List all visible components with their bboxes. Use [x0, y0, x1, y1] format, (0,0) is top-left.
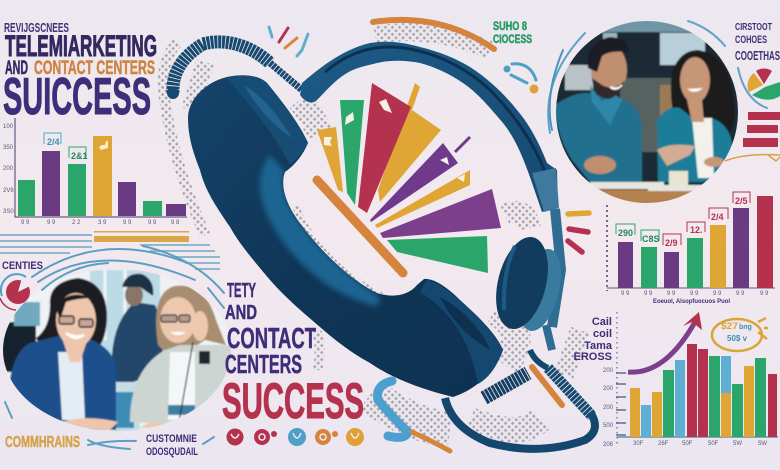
label: customer text [146, 433, 198, 458]
badge: gold circle stat: $27 [721, 321, 738, 331]
bar chart: right lower with arrow [603, 312, 778, 448]
headset ear cup [487, 232, 569, 335]
icon: curly phone cord left [167, 42, 302, 99]
middle heading block: SUCCESS [222, 373, 364, 429]
label: customer text: CUSTOMNIE [146, 433, 197, 445]
bar chart: top left: 2 2 [72, 220, 81, 226]
halftone dot backdrop [163, 32, 580, 430]
bar chart: right upper: C8S [642, 234, 660, 244]
bar chart: top left: 9 9 [47, 220, 56, 226]
bar chart: right upper [607, 192, 775, 305]
fan chart: coloured rays [317, 83, 501, 273]
photo: two women at desk [3, 269, 231, 431]
person: woman with curly hair [657, 50, 735, 182]
label: centers: CENTIES [2, 260, 43, 272]
label: chart axis title [573, 316, 613, 363]
bar chart: right lower with arrow: 500 [603, 423, 614, 429]
bar chart: top left: 100 [3, 124, 14, 130]
bar chart: right lower with arrow: 50F [708, 441, 719, 447]
bar chart: right upper: 9 9 [760, 291, 769, 297]
blue arcs around right photo [548, 21, 767, 133]
person: man in teal shirt [555, 37, 642, 182]
bar chart: top left: 9 9 [148, 220, 157, 226]
headset band [300, 42, 561, 327]
bar chart: right lower with arrow: 200 [603, 405, 614, 411]
bar chart: right lower with arrow: 200 [603, 368, 614, 374]
bar chart: right upper: 9 9 [713, 291, 722, 297]
middle heading block [222, 280, 364, 429]
label: success process: CIOCESS [493, 32, 532, 46]
text lines strip: left middle [0, 231, 220, 270]
label: chart axis title: Cail [592, 316, 612, 328]
small accent strokes top [269, 27, 308, 56]
person: woman right in grey jacket [130, 286, 232, 428]
bar chart: right upper: 9 9 [667, 291, 676, 297]
label: customer text: ODOSQUDAIL [146, 446, 198, 458]
orange swoosh top [373, 20, 494, 49]
person: man in background [111, 274, 163, 385]
middle heading block: CENTERS [225, 349, 302, 379]
right heading text [735, 22, 780, 63]
middle heading block: CONTACT [227, 323, 316, 355]
bar chart: top left: 350 [3, 145, 14, 151]
bar chart: top left: 2V8 [3, 188, 14, 194]
headset cable [445, 325, 595, 449]
title block: top left: CONTACT CENTERS [34, 58, 155, 79]
title block: top left: AND [5, 58, 28, 79]
blue arcs over left photo [5, 246, 224, 449]
bar chart: right upper: 9 9 [736, 291, 745, 297]
icon: blue curved arrow [378, 381, 408, 437]
bar chart: right upper: 12. [690, 225, 703, 235]
label: success process: SUHO 8 [493, 19, 527, 33]
bar chart: right upper: Eoeuol, Alsopfuocuos Puol [653, 298, 730, 305]
label: success process [493, 19, 532, 46]
label: chart axis title: Tama [584, 340, 613, 352]
icon: small blue hook with dot [504, 64, 538, 94]
accent strokes right of headset [568, 213, 589, 252]
bar chart: top left: 9 9 [21, 220, 30, 226]
icon row: five round badges [226, 428, 364, 446]
bar chart: top left [3, 118, 187, 226]
badge: gold circle stat: 50$ v [727, 334, 748, 343]
title block: top left: TELEMIARKETING [5, 30, 157, 63]
icon: right pie chart [747, 68, 780, 100]
bar chart: right lower with arrow: 200 [603, 386, 614, 392]
bar chart: top left: 2/4 [47, 137, 60, 147]
bar chart: right upper: 2/4 [711, 212, 724, 222]
bar chart: right upper: 9 9 [690, 291, 699, 297]
photo: man and woman at cafe table [555, 20, 739, 208]
bar chart: right lower with arrow: 206 [603, 442, 614, 448]
accent: orange dash under arrow [412, 432, 450, 451]
telephone handset [188, 75, 503, 397]
bar chart: right upper: 2/9 [665, 238, 678, 248]
person: woman left in blue jacket [7, 278, 118, 430]
badge: gold circle stat: bng [739, 324, 752, 331]
middle heading block: TETY [227, 280, 256, 302]
label: chart axis title: coil [593, 328, 612, 340]
red legend buttons [743, 112, 780, 147]
badge: gold circle stat [712, 318, 768, 351]
icon: left pie [0, 274, 30, 310]
bar chart: right lower with arrow: 26F [658, 441, 669, 447]
title block: top left [3, 20, 157, 126]
bar chart: right upper: 9 9 [644, 291, 653, 297]
label: bottom left gold: COMMHRAINS [5, 434, 80, 451]
bar chart: right lower with arrow: 5W [758, 441, 767, 447]
middle heading block: AND [225, 302, 257, 324]
label: chart axis title: EROSS [573, 351, 612, 363]
bar chart: right upper: 290 [618, 228, 633, 238]
bar chart: right upper: 2/5 [735, 196, 748, 206]
bar chart: right upper: 9 9 [621, 291, 630, 297]
bar chart: right lower with arrow: 5W [733, 441, 742, 447]
gold ribbon [725, 155, 780, 161]
bar chart: top left: 3 9 [98, 220, 107, 226]
bar chart: top left: 9 9 [123, 220, 132, 226]
bar chart: top left: 9 8 [171, 220, 180, 226]
accent: orange bar by cable [532, 367, 562, 405]
bar chart: right lower with arrow: 30F [633, 441, 644, 447]
title block: top left: REVIJGSCNEES [4, 20, 69, 35]
bar chart: right lower with arrow: 50F [682, 441, 693, 447]
bar chart: top left: 3S0 [3, 209, 14, 215]
bar chart: top left: 200 [3, 166, 14, 172]
bar chart: top left: 2&1 [71, 151, 88, 161]
title block: top left: SUICCESS [3, 68, 151, 126]
arrow: rising growth [628, 312, 702, 372]
